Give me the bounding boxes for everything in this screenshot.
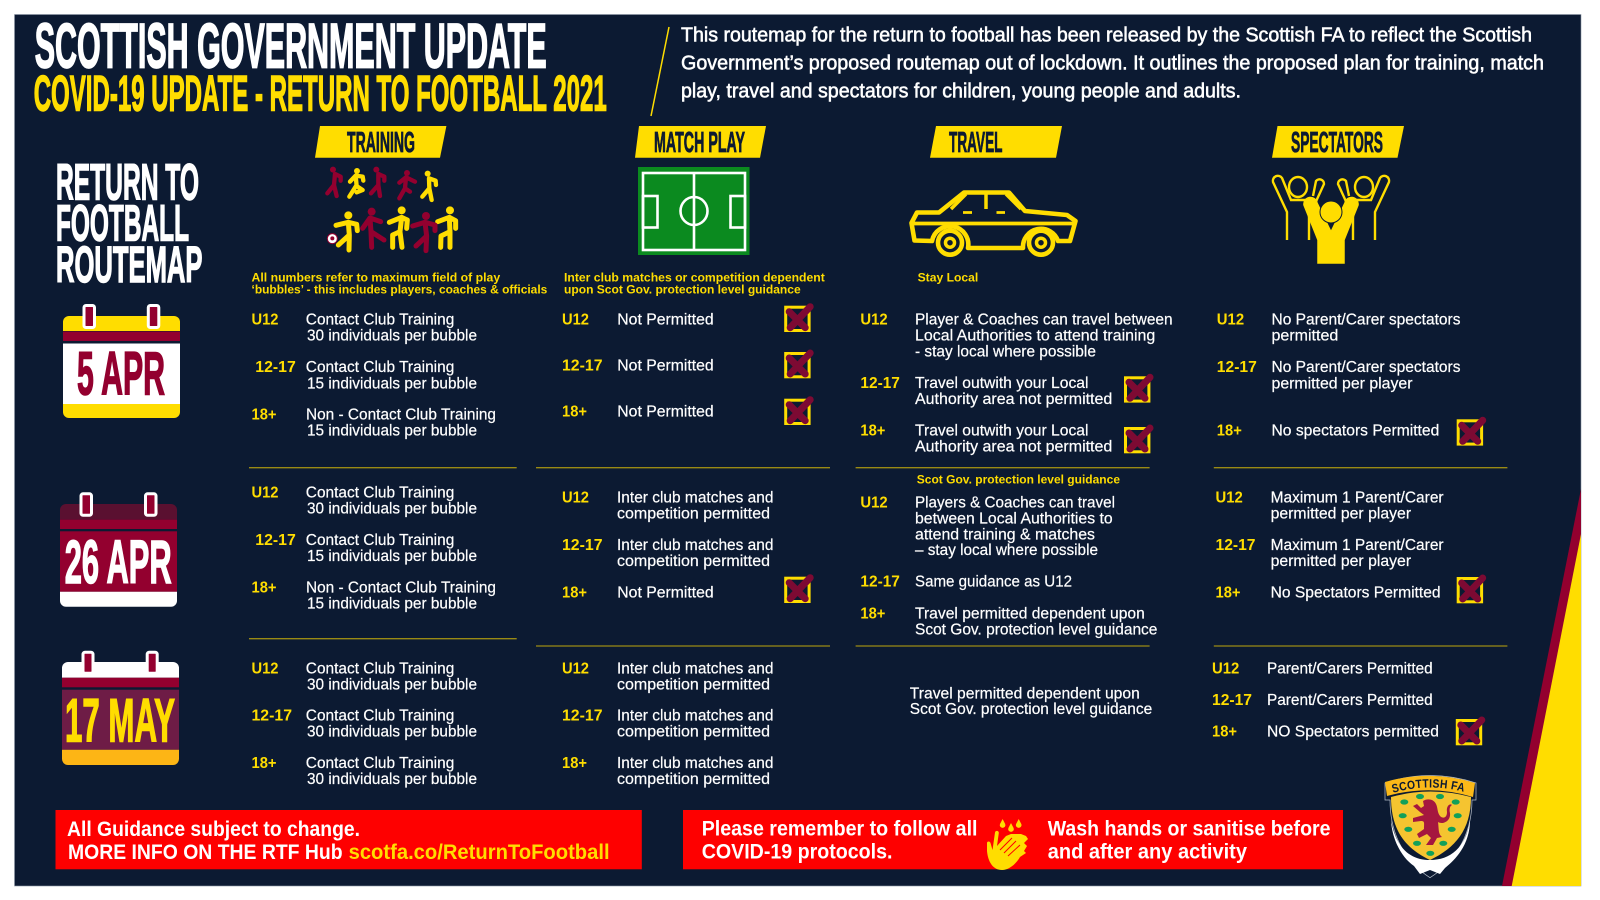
spectators: 5 Apr: 18+ (1217, 423, 1242, 440)
icon: spectators (1273, 176, 1389, 263)
spectators: 5 Apr: 12-17 (1217, 359, 1257, 376)
match play: 5 Apr: Not Permitted (617, 358, 714, 375)
spectators: 26 Apr: No Spectators Permitted (1271, 585, 1441, 602)
travel: 5 Apr: Authority area not permitted (915, 439, 1112, 456)
spectators: 5 Apr: No spectators Permitted (1272, 423, 1439, 440)
match play: 17 May: Inter club matches and (617, 755, 774, 772)
travel: 5 Apr: - stay local where possible (915, 344, 1096, 361)
note: training (252, 270, 548, 296)
calendar: 5 Apr (63, 306, 180, 418)
callout: guidance: All Guidance subject to change. (67, 818, 360, 841)
match play: 26 Apr: Inter club matches and (617, 490, 774, 507)
travel: 5 Apr: Local Authorities to attend training (915, 328, 1155, 345)
note: training: ‘bubbles’ - this includes players, coaches & officials (252, 282, 548, 296)
training: 17 May: Contact Club Training (306, 708, 454, 725)
training: 26 Apr: Contact Club Training (306, 484, 454, 501)
calendar: 26 Apr (60, 494, 177, 607)
travel: 26 Apr: Scot Gov. protection level guidance (917, 473, 1120, 487)
match play: 26 Apr: competition permitted (617, 506, 770, 523)
calendar: 26 Apr: 26 APR (65, 528, 172, 596)
icon: washing hands (987, 819, 1028, 870)
travel: 26 Apr: – stay local where possible (915, 542, 1098, 559)
spectators: 26 Apr: U12 (1216, 490, 1243, 507)
title (34, 12, 607, 122)
slash divider (651, 27, 669, 116)
match play: 17 May: Inter club matches and (617, 708, 774, 725)
training: 26 Apr: Non - Contact Club Training (306, 580, 496, 597)
tab: spectators (1272, 126, 1404, 159)
travel: 5 Apr: Travel outwith your Local (915, 423, 1088, 440)
text: COVID-19 UPDATE - RETURN TO FOOTBALL 2021 (34, 66, 607, 122)
dividers (249, 468, 1507, 646)
calendar: 17 May: 17 MAY (65, 686, 175, 754)
note: match play (564, 270, 825, 296)
spectators: 17 May: 18+ (1212, 724, 1237, 741)
callout: protocols (683, 810, 1343, 869)
spectators: 5 Apr: permitted per player (1272, 375, 1412, 392)
callout: protocols: Please remember to follow all (702, 817, 978, 840)
training: 26 Apr: 15 individuals per bubble (307, 595, 477, 612)
travel: 5 Apr (860, 312, 1173, 456)
training: 26 Apr: 15 individuals per bubble (307, 548, 477, 565)
text: RETURN TO (56, 154, 199, 211)
training: 5 Apr: 15 individuals per bubble (307, 423, 477, 440)
match play: 26 Apr: Not Permitted (617, 585, 714, 602)
intro paragraph: This routemap for the return to football has been released by the Scottish FA to reflect the Scottish (681, 23, 1532, 46)
travel: 5 Apr: Travel outwith your Local (915, 375, 1088, 392)
training: 5 Apr: 12-17 (255, 359, 296, 376)
match play: 17 May: competition permitted (617, 771, 770, 788)
icon: football pitch (638, 167, 750, 255)
calendar: 17 May (62, 652, 179, 765)
tab: training (315, 126, 446, 159)
training: 26 Apr (252, 484, 496, 612)
travel: 26 Apr: Travel permitted dependent upon (915, 605, 1145, 622)
training: 5 Apr: 18+ (252, 407, 276, 424)
tab: training: TRAINING (347, 127, 415, 159)
match play: 5 Apr: U12 (562, 312, 589, 329)
training: 26 Apr: Contact Club Training (306, 532, 454, 549)
travel: 26 Apr: Scot Gov. protection level guidance (915, 621, 1157, 638)
spectators: 5 Apr: No Parent/Carer spectators (1272, 359, 1461, 376)
intro paragraph: play, travel and spectators for children, young people and adults. (681, 79, 1241, 102)
match play: 5 Apr (562, 312, 714, 421)
heading: routemap (56, 154, 202, 293)
travel: 5 Apr: U12 (860, 312, 888, 329)
training: 5 Apr: 30 individuals per bubble (307, 328, 477, 345)
match play: 26 Apr: U12 (562, 490, 589, 507)
spectators: 26 Apr: Maximum 1 Parent/Carer (1271, 537, 1444, 554)
travel: 26 Apr: between Local Authorities to (915, 511, 1113, 528)
match play: 17 May: competition permitted (617, 724, 770, 741)
spectators: 26 Apr: permitted per player (1271, 553, 1411, 570)
callout: protocols: and after any activity (1048, 840, 1247, 863)
travel: 26 Apr: U12 (860, 495, 888, 512)
travel: 17 May: Travel permitted dependent upon (910, 685, 1140, 702)
match play: 26 Apr: 12-17 (562, 537, 603, 554)
match play: 26 Apr (562, 490, 774, 602)
callout: guidance: MORE INFO ON THE RTF Hub (68, 841, 343, 864)
travel: 5 Apr: Player & Coaches can travel between (915, 312, 1173, 329)
training: 5 Apr: Contact Club Training (306, 312, 454, 329)
calendar: 5 Apr: 5 APR (77, 340, 165, 408)
callout: protocols: COVID-19 protocols. (702, 840, 892, 863)
match play: 26 Apr: Inter club matches and (617, 537, 774, 554)
tab: match play: MATCH PLAY (654, 127, 745, 159)
match play: 5 Apr: 12-17 (562, 358, 603, 375)
training: 17 May: 30 individuals per bubble (307, 724, 477, 741)
training: 26 Apr: U12 (252, 484, 279, 501)
crossed checkboxes (786, 307, 1483, 744)
training: 26 Apr: 18+ (252, 580, 276, 597)
training: 17 May: 12-17 (252, 708, 292, 725)
training: 17 May: 18+ (252, 755, 276, 772)
travel: 17 May (910, 685, 1152, 718)
travel: 26 Apr: attend training & matches (915, 526, 1095, 543)
spectators: 17 May: NO Spectators permitted (1267, 724, 1439, 741)
training: 5 Apr: 15 individuals per bubble (307, 375, 477, 392)
spectators: 17 May: Parent/Carers Permitted (1267, 660, 1433, 677)
spectators: 5 Apr (1217, 312, 1461, 440)
match play: 17 May: U12 (562, 660, 589, 677)
travel: 17 May: Scot Gov. protection level guidance (910, 701, 1152, 718)
heading: routemap: ROUTEMAP (56, 236, 202, 293)
training: 5 Apr: Non - Contact Club Training (306, 407, 496, 424)
spectators: 5 Apr: permitted (1272, 328, 1338, 345)
heading: routemap: FOOTBALL (56, 194, 189, 251)
travel: 26 Apr: 18+ (860, 605, 885, 622)
note: travel: Stay Local (918, 270, 978, 284)
match play: 17 May: 12-17 (562, 708, 603, 725)
spectators: 26 Apr: 12-17 (1216, 537, 1256, 554)
note: training: All numbers refer to maximum field of play (252, 270, 501, 284)
training: 17 May: Contact Club Training (306, 755, 454, 772)
travel: 5 Apr: 18+ (860, 423, 885, 440)
spectators: 26 Apr (1216, 490, 1444, 602)
match play: 5 Apr: 18+ (562, 404, 587, 421)
spectators: 17 May: U12 (1212, 660, 1239, 677)
crest: Scottish FA (1384, 775, 1476, 878)
callout: protocols: Wash hands or sanitise before (1048, 817, 1330, 840)
icon: players (327, 167, 456, 251)
match play: 5 Apr: Not Permitted (617, 404, 714, 421)
match play: 17 May: Inter club matches and (617, 660, 774, 677)
training: 5 Apr (252, 312, 496, 440)
training: 26 Apr: 12-17 (255, 532, 296, 549)
callout: guidance (56, 810, 642, 869)
spectators: 26 Apr: Maximum 1 Parent/Carer (1271, 490, 1444, 507)
spectators: 5 Apr: No Parent/Carer spectators (1272, 312, 1461, 329)
travel: 5 Apr: Authority area not permitted (915, 391, 1112, 408)
tab: match play (635, 126, 766, 159)
training: 26 Apr: 30 individuals per bubble (307, 500, 477, 517)
crest: Scottish FA: SCOTTISH FA (1392, 779, 1464, 792)
spectators: 17 May: 12-17 (1212, 692, 1252, 709)
note: match play: Inter club matches or competition dependent (564, 270, 825, 284)
match play: 26 Apr: 18+ (562, 585, 587, 602)
match play: 17 May: competition permitted (617, 676, 770, 693)
spectators: 26 Apr: 18+ (1216, 585, 1240, 602)
tab: spectators: SPECTATORS (1291, 127, 1383, 159)
match play: 17 May (562, 660, 774, 788)
travel: 26 Apr: Same guidance as U12 (915, 574, 1072, 591)
training: 17 May (252, 660, 477, 788)
callout: guidance: scotfa.co/ReturnToFootball (349, 841, 610, 864)
training: 17 May: 30 individuals per bubble (307, 771, 477, 788)
spectators: 26 Apr: permitted per player (1271, 506, 1411, 523)
travel: 26 Apr: Players & Coaches can travel (915, 495, 1115, 512)
note: match play: upon Scot Gov. protection level guidance (564, 282, 801, 296)
travel: 26 Apr: 12-17 (860, 574, 900, 591)
intro paragraph: Government’s proposed routemap out of lockdown. It outlines the proposed plan for training, match (681, 51, 1544, 74)
training: 5 Apr: Contact Club Training (306, 359, 454, 376)
corner stripes (1502, 489, 1581, 886)
training: 17 May: Contact Club Training (306, 660, 454, 677)
travel: 26 Apr (860, 473, 1157, 638)
intro paragraph (681, 23, 1544, 102)
travel: 5 Apr: 12-17 (860, 375, 900, 392)
training: 5 Apr: U12 (252, 312, 279, 329)
match play: 17 May: 18+ (562, 755, 587, 772)
spectators: 17 May: Parent/Carers Permitted (1267, 692, 1433, 709)
match play: 5 Apr: Not Permitted (617, 312, 714, 329)
training: 17 May: 30 individuals per bubble (307, 676, 477, 693)
match play: 26 Apr: competition permitted (617, 553, 770, 570)
spectators: 5 Apr: U12 (1217, 312, 1244, 329)
spectators: 17 May (1212, 660, 1439, 741)
title: SCOTTISH GOVERNMENT UPDATE (35, 12, 547, 82)
training: 17 May: U12 (252, 660, 279, 677)
tab: travel: TRAVEL (949, 127, 1002, 159)
icon: car (912, 192, 1076, 255)
